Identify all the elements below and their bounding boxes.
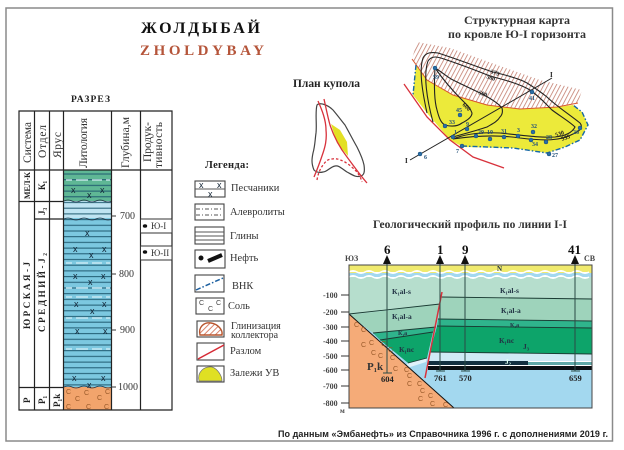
wells: 575 (489, 69, 500, 78)
lithology column: x (101, 373, 106, 383)
well numbers: 9 (462, 242, 469, 257)
lithology column: x (87, 380, 92, 390)
wells: 59 (433, 75, 439, 81)
lithology column: C (84, 390, 89, 397)
legend: salt: Соль (228, 301, 250, 312)
lithology column: x (101, 271, 106, 281)
legend: siltstone: Алевролиты (230, 207, 285, 218)
legend: sandstone: x (208, 189, 213, 199)
wells: 33 (449, 120, 455, 126)
clay-out boundary (412, 59, 578, 109)
lithology column: x (73, 244, 78, 254)
heading: structural map: по кровле Ю-I горизонта (448, 27, 586, 41)
lithology column: x (75, 326, 80, 336)
legend: sandstone: x (217, 180, 222, 190)
salt symbols: C (388, 347, 393, 354)
wells: 580 (485, 74, 496, 83)
column headers: Отдел (37, 125, 49, 158)
lithology column: x (89, 250, 94, 260)
formation labels (367, 265, 530, 373)
depth axis: м (340, 407, 345, 415)
depth scale: 800 (119, 269, 134, 280)
wells: 27 (552, 153, 558, 159)
structure contours (421, 53, 581, 140)
well numbers: 604 (381, 374, 394, 384)
lithology column (64, 170, 112, 411)
depth axis: -600 (323, 366, 338, 375)
yellow deposit (413, 64, 588, 153)
salt symbols: C (393, 366, 398, 373)
legend: sandstone (195, 180, 280, 199)
legend: oil (195, 250, 259, 268)
formation labels: К₁al-s (392, 287, 411, 296)
system and series labels: СРЕДНИЙ-J₂ (37, 253, 47, 332)
profile line I-I: I (405, 157, 408, 165)
wells: 31 (501, 129, 507, 135)
lithology column: x (85, 228, 90, 238)
depth scale: 1000 (118, 382, 138, 393)
formation labels: P₁k (367, 361, 384, 373)
lithology column: x (100, 185, 105, 195)
legend: reservoir clay-out: Глинизация (231, 321, 281, 332)
wells: 32 (531, 124, 537, 130)
heading: structural map: Структурная карта (464, 13, 570, 27)
geological profile (323, 242, 596, 415)
wells: 34 (532, 142, 538, 148)
wells: 600 (461, 102, 471, 113)
system and series labels: МЕЛ-К (23, 172, 32, 199)
salt symbols (354, 322, 448, 409)
title: ZHOLDYBAY (140, 43, 264, 59)
depth scale: 700 (120, 211, 135, 222)
legend: fault: Разлом (230, 346, 262, 357)
legend: clay: Глины (230, 231, 259, 242)
depth axis: -400 (323, 337, 338, 346)
legend: hydrocarbon deposit: Залежи УВ (230, 368, 279, 379)
source note: По данным «Эмбанефть» из Справочника 1996 г. с дополнениями 2019 г. (278, 429, 608, 439)
wells (418, 66, 582, 161)
heading: structural map (448, 13, 586, 41)
formation labels: К₁al-a (501, 306, 521, 315)
well numbers: 6 (384, 242, 391, 257)
system and series labels: P₁ (37, 396, 47, 404)
salt symbols: C (378, 353, 383, 360)
depth axis: -500 (323, 352, 338, 361)
legend: sandstone: x (199, 180, 204, 190)
lithology column: x (87, 190, 92, 200)
formation labels: К₁a (398, 331, 407, 337)
salt symbols: C (361, 342, 366, 349)
wells: 1 (454, 130, 457, 136)
formation labels: К₁nc (499, 336, 515, 345)
legend: hydrocarbon deposit (197, 366, 279, 382)
legend: sandstone: Песчаники (231, 183, 280, 194)
legend: water-oil contact: ВНК (232, 281, 253, 292)
depth axis: -800 (323, 399, 338, 408)
depth axis: -300 (323, 323, 338, 332)
formation labels: J₃ (523, 342, 530, 351)
wells: 29 (478, 130, 484, 136)
system and series labels (22, 172, 62, 407)
title (140, 18, 264, 59)
productive horizons (140, 219, 172, 260)
column headers (22, 116, 165, 168)
lithology column: x (72, 373, 77, 383)
salt symbols: C (420, 388, 425, 395)
salt symbols: C (369, 340, 374, 347)
lithology column: C (104, 404, 109, 411)
salt symbols: C (430, 401, 435, 408)
lithology column: x (73, 271, 78, 281)
wells: 7 (456, 149, 459, 155)
column headers: Глубина,м (120, 116, 132, 168)
direction labels (345, 254, 596, 263)
wells: 41 (529, 96, 535, 102)
wells: 590 (477, 90, 488, 99)
structural map (404, 42, 588, 168)
depth axis: -700 (323, 382, 338, 391)
salt symbols: C (407, 373, 412, 380)
productive horizons: Ю-I (151, 221, 166, 231)
legend: oil: Нефть (230, 253, 259, 264)
system and series labels: К₁ (37, 180, 47, 190)
direction labels: ЮЗ (345, 254, 358, 263)
system and series labels: P (22, 397, 32, 403)
wells: 6 (424, 155, 427, 161)
wells: 28 (546, 135, 552, 141)
lithology column: C (66, 404, 71, 411)
table grid (19, 111, 172, 410)
salt symbols: C (443, 402, 448, 409)
lithology column: C (97, 395, 102, 402)
salt symbols: C (390, 355, 395, 362)
lithology column: C (86, 404, 91, 411)
system and series labels: P₁k (52, 394, 62, 407)
depth scale (111, 211, 138, 393)
wells: 3 (517, 128, 520, 134)
well numbers: 1 (437, 242, 444, 257)
strata (349, 265, 592, 408)
lithology column: C (75, 396, 80, 403)
salt symbols: C (418, 396, 423, 403)
formation labels: К₁a (510, 323, 519, 329)
wells: 530 (555, 130, 565, 139)
salt symbols: C (371, 350, 376, 357)
heading: geological profile: Геологический профиль по линии I-I (373, 219, 568, 231)
direction labels: СВ (584, 254, 596, 263)
title: ЖОЛДЫБАЙ (141, 18, 261, 37)
system and series labels: ЮРСКАЯ-J (22, 262, 32, 329)
wells: 535 (561, 134, 571, 143)
lithology column: C (66, 389, 71, 396)
lithology column: x (102, 299, 107, 309)
productive horizons: Ю-II (151, 248, 169, 258)
legend: salt (196, 298, 250, 314)
wells: 26 (573, 130, 579, 136)
legend title: Легенда: (205, 160, 249, 171)
heading: dome plan: План купола (293, 78, 360, 90)
salt symbols: C (417, 381, 422, 388)
column headers: Система (22, 122, 34, 163)
lithology column: x (74, 299, 79, 309)
column headers: Ярус (52, 132, 64, 158)
stratigraphic column (19, 111, 172, 411)
salt symbols: C (354, 322, 359, 329)
salt symbols: C (404, 367, 409, 374)
dome plan map (312, 99, 367, 183)
formation labels: N (497, 265, 502, 273)
legend: salt: C (216, 300, 221, 307)
lithology column: x (88, 277, 93, 287)
heading: section: РАЗРЕЗ (71, 95, 110, 105)
lithology column: C (105, 389, 110, 396)
legend: clay (195, 227, 259, 244)
profile line I-I: I (550, 71, 553, 79)
wells: 9 (466, 122, 469, 128)
salt symbols: C (407, 381, 412, 388)
salt symbols: C (381, 341, 386, 348)
wells: 10 (487, 130, 493, 136)
column headers: Продук- (142, 122, 154, 162)
depth axis: -100 (323, 291, 338, 300)
formation labels: J₂ (505, 357, 512, 366)
well numbers: 761 (434, 373, 447, 383)
legend: siltstone (195, 204, 285, 220)
formation labels: К₁al-s (500, 286, 519, 295)
legend: fault (197, 343, 262, 360)
formation labels: К₁al-a (392, 312, 412, 321)
legend: salt: C (208, 306, 213, 313)
water-oil contact line (413, 65, 588, 153)
lithology column: x (71, 185, 76, 195)
lithology column: x (102, 244, 107, 254)
legend (195, 160, 285, 382)
lithology column: x (103, 326, 108, 336)
legend: reservoir clay-out (197, 321, 281, 341)
fault line (404, 84, 504, 168)
lithology column: x (90, 306, 95, 316)
column headers: тивность (153, 122, 165, 168)
well numbers: 41 (568, 242, 581, 257)
legend: water-oil contact (195, 275, 253, 292)
well numbers (381, 242, 582, 384)
well numbers: 659 (569, 373, 582, 383)
system and series labels: J₃ (37, 208, 47, 215)
wells (383, 255, 580, 373)
salt symbols: C (428, 393, 433, 400)
profile line I-I (405, 71, 553, 165)
well numbers: 570 (459, 373, 472, 383)
legend: salt: C (199, 300, 204, 307)
depth scale: 900 (120, 325, 135, 336)
depth axis: -200 (323, 308, 338, 317)
salt symbols: C (361, 327, 366, 334)
formation labels: К₁nc (399, 345, 415, 354)
column headers: Литология (78, 117, 90, 168)
depth axis (323, 291, 349, 415)
hatched clay-out zone (412, 42, 582, 109)
wells: 45 (456, 108, 462, 114)
legend: reservoir clay-out: коллектора (231, 330, 279, 341)
